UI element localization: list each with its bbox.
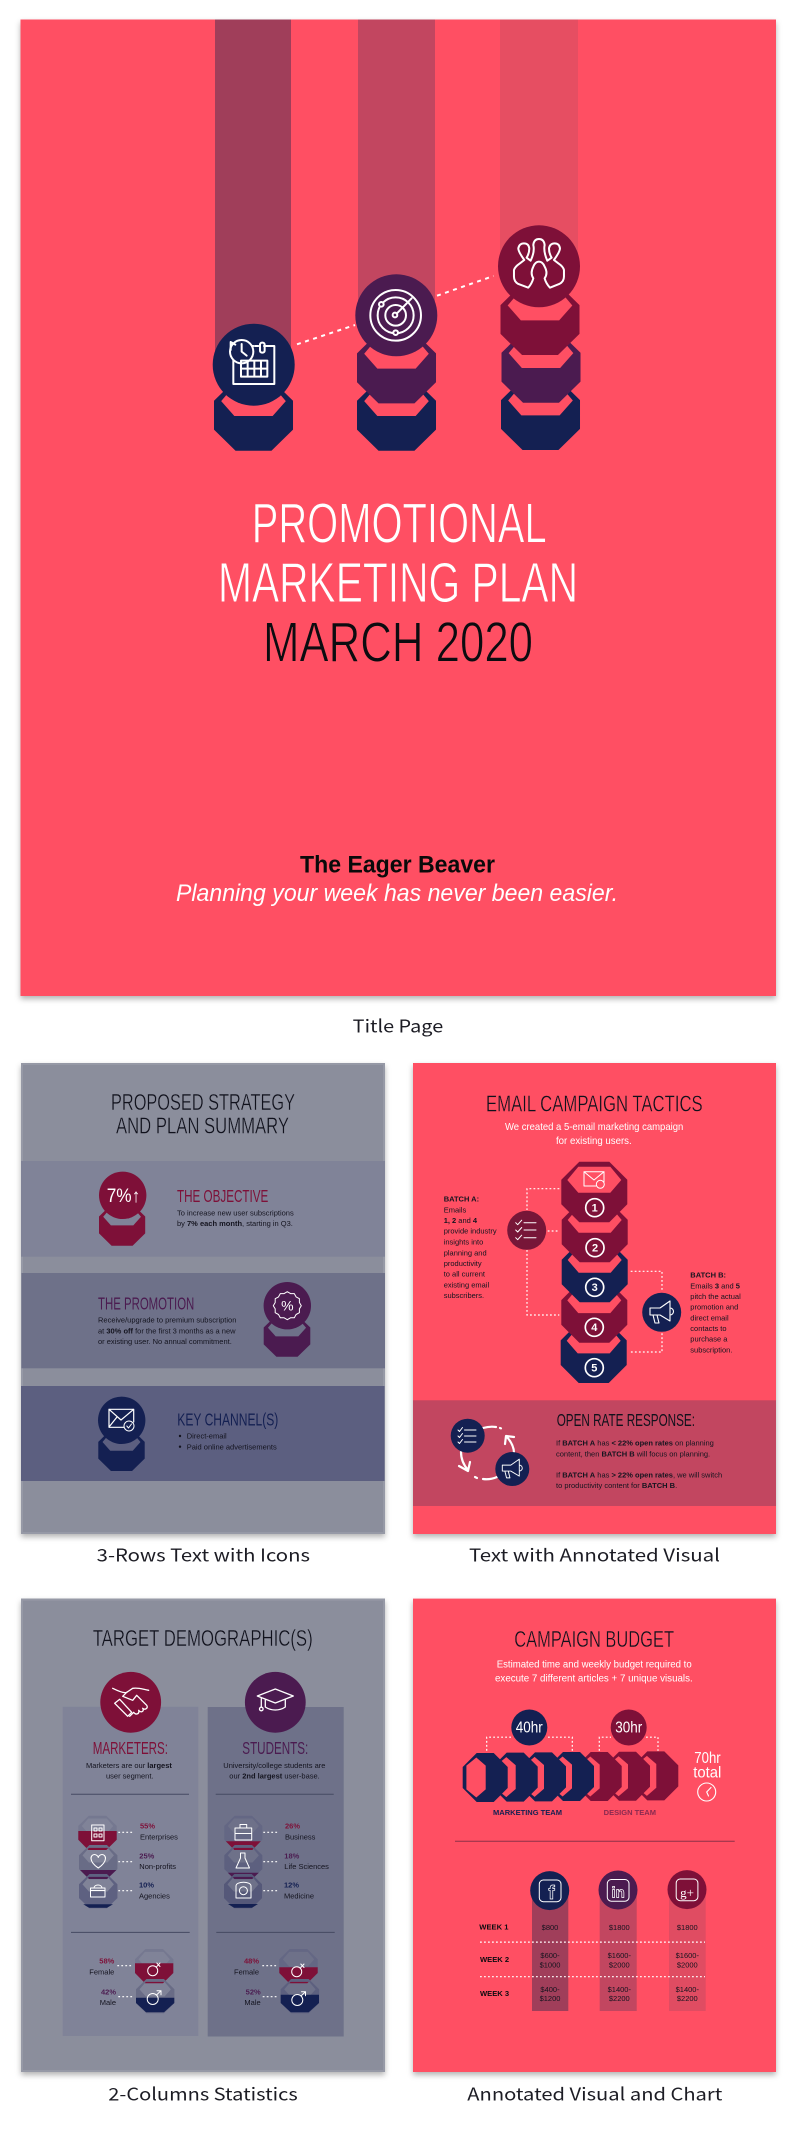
segment labels: marketers: Agencies bbox=[139, 1891, 170, 1900]
segment labels: marketers: Non-profits bbox=[139, 1862, 176, 1871]
icon: heart bbox=[91, 1854, 105, 1868]
row labels: WEEK 3 bbox=[480, 1989, 509, 1998]
heading: TARGET DEMOGRAPHIC(S) bbox=[93, 1625, 313, 1651]
numbers in stack: 5 bbox=[591, 1363, 597, 1375]
text: batch A: BATCH A: bbox=[444, 1195, 479, 1204]
numbers in stack: 2 bbox=[592, 1243, 598, 1255]
text: batch B: purchase a bbox=[690, 1335, 728, 1344]
chart: weekly budget bbox=[479, 1870, 706, 2011]
text: batch A: planning and bbox=[444, 1248, 487, 1257]
team labels: DESIGN TEAM bbox=[604, 1808, 656, 1817]
label: marketers: MARKETERS: bbox=[93, 1738, 168, 1758]
text: batch B: direct email bbox=[690, 1313, 729, 1322]
timeline: team hours bbox=[463, 1751, 678, 1802]
row labels: WEEK 2 bbox=[480, 1955, 509, 1964]
budget values: $1000 bbox=[540, 1960, 560, 1969]
segment labels: marketers: 55% bbox=[140, 1822, 155, 1831]
cycle arrows bbox=[459, 1427, 514, 1479]
label: marketers: Marketers are our largest bbox=[86, 1761, 172, 1770]
total hours: total bbox=[693, 1765, 721, 1782]
subheading bbox=[495, 1658, 693, 1685]
budget values: $400- bbox=[540, 1985, 560, 1994]
icon: facebook bbox=[530, 1871, 569, 1910]
text: batch B bbox=[690, 1271, 741, 1354]
budget values: $1600- bbox=[676, 1951, 699, 1960]
icon: percent badge: % bbox=[281, 1298, 294, 1314]
heading bbox=[111, 1089, 295, 1138]
text: batch B: pitch the actual bbox=[690, 1292, 741, 1301]
total hours bbox=[693, 1750, 721, 1801]
icon: envelope in stack bbox=[584, 1172, 604, 1188]
segment labels: marketers: Enterprises bbox=[140, 1832, 178, 1841]
text: promotion: or existing user. No annual commitment. bbox=[98, 1337, 232, 1346]
panel: email campaign tactics bbox=[413, 1063, 776, 1534]
caption: annotated chart: Annotated Visual and Chart bbox=[467, 2082, 723, 2107]
bar: google plus bbox=[669, 1890, 706, 2011]
budget values: $2000 bbox=[677, 1960, 698, 1969]
label: students bbox=[223, 1738, 325, 1781]
segment labels: marketers: 10% bbox=[139, 1881, 154, 1890]
segment labels: students: 12% bbox=[284, 1881, 299, 1890]
text: promotion: THE PROMOTION bbox=[98, 1293, 194, 1313]
chart: student segments bbox=[224, 1816, 262, 1908]
segment labels: students: 18% bbox=[284, 1852, 300, 1861]
segment labels: students bbox=[263, 1822, 329, 1900]
text: batch A: subscribers. bbox=[444, 1291, 484, 1300]
badge: 40 hours bbox=[511, 1710, 547, 1746]
dotted connectors: batch B bbox=[631, 1271, 662, 1352]
gender labels: marketers: Male bbox=[100, 1998, 116, 2007]
icon: megaphone bbox=[642, 1293, 681, 1332]
band: open rate response bbox=[413, 1400, 776, 1506]
text: batch A: existing email bbox=[444, 1280, 489, 1289]
icon: seven percent up: 7%↑ bbox=[107, 1186, 140, 1207]
team labels bbox=[493, 1808, 656, 1817]
segment labels: students: Life Sciences bbox=[284, 1862, 329, 1871]
company name: The Eager Beaver bbox=[300, 852, 495, 879]
chart: marketer segments bbox=[78, 1816, 117, 1908]
icon: calendar and clock bbox=[230, 340, 274, 384]
segment labels: students: Business bbox=[285, 1832, 316, 1841]
bar: column three bbox=[500, 20, 578, 266]
segment labels: students: Medicine bbox=[284, 1891, 314, 1900]
bar: linkedin bbox=[600, 1890, 637, 2011]
text: batch B: contacts to bbox=[690, 1324, 727, 1333]
gender labels: marketers bbox=[89, 1957, 134, 2007]
icon: building bbox=[92, 1825, 104, 1841]
bar: column one bbox=[215, 20, 291, 366]
heading: PROPOSED STRATEGY bbox=[111, 1089, 295, 1115]
icon: flask bbox=[236, 1853, 250, 1868]
budget values: $600- bbox=[540, 1951, 560, 1960]
text: batch B: Emails 3 and 5 bbox=[690, 1281, 740, 1290]
segment labels: students: 26% bbox=[285, 1822, 300, 1831]
gender labels: marketers: Female bbox=[89, 1967, 114, 1976]
text: objective bbox=[177, 1186, 294, 1228]
label: students: our 2nd largest user-base. bbox=[229, 1772, 320, 1781]
budget values: $1600- bbox=[608, 1951, 631, 1960]
heading: EMAIL CAMPAIGN TACTICS bbox=[486, 1090, 703, 1116]
text: key channels bbox=[177, 1410, 278, 1451]
badge: 40 hours: 40hr bbox=[516, 1720, 543, 1737]
subheading: execute 7 different articles + 7 unique visuals. bbox=[495, 1673, 693, 1685]
text: batch A: Emails bbox=[444, 1205, 466, 1214]
chart: student gender bbox=[279, 1949, 319, 2013]
panel: target demographics bbox=[21, 1599, 385, 2072]
text: batch A: productivity bbox=[444, 1259, 482, 1268]
heading: AND PLAN SUMMARY bbox=[116, 1112, 289, 1138]
panel: campaign budget bbox=[413, 1599, 776, 2072]
subheading: Estimated time and weekly budget required to bbox=[497, 1658, 692, 1670]
column: marketers bbox=[63, 1672, 198, 2036]
text: batch B: promotion and bbox=[690, 1303, 738, 1312]
text: promotion: at 30% off for the first 3 months as a new bbox=[98, 1326, 236, 1335]
subheading: We created a 5-email marketing campaign bbox=[505, 1121, 683, 1133]
tagline: Planning your week has never been easier. bbox=[176, 880, 618, 907]
gender labels: marketers: 42% bbox=[101, 1988, 116, 1997]
text: promotion: Receive/upgrade to premium subscription bbox=[98, 1316, 236, 1325]
label: students: University/college students are bbox=[223, 1761, 325, 1770]
text: key channels: Direct-email bbox=[187, 1432, 227, 1441]
numbers in stack bbox=[585, 1199, 604, 1377]
gender labels: students: 52% bbox=[246, 1988, 261, 1997]
icon: audience group bbox=[514, 239, 564, 288]
label: students: STUDENTS: bbox=[242, 1738, 308, 1758]
icon: radar bbox=[370, 290, 421, 341]
caption: title page: Title Page bbox=[353, 1014, 443, 1039]
subheading bbox=[505, 1121, 683, 1147]
numbers in stack: 3 bbox=[592, 1282, 598, 1294]
caption: three rows: 3-Rows Text with Icons bbox=[97, 1543, 310, 1568]
text: open rate response: If BATCH A has > 22% open rates, we will switch bbox=[556, 1470, 722, 1479]
text: batch A bbox=[444, 1195, 497, 1300]
stack: column three bbox=[498, 225, 581, 450]
dotted brackets bbox=[487, 1737, 658, 1751]
stack: column one bbox=[213, 324, 295, 451]
chart: marketer gender bbox=[135, 1949, 174, 2013]
gender labels: students: 48% bbox=[244, 1957, 259, 1966]
badge: 30 hours: 30hr bbox=[615, 1720, 643, 1737]
caption: annotated visual: Text with Annotated Visual bbox=[469, 1543, 720, 1568]
icon: percent badge bbox=[264, 1282, 311, 1357]
title line one: PROMOTIONAL bbox=[252, 493, 547, 556]
icon: person at desk bbox=[90, 1885, 105, 1897]
badge: 30 hours bbox=[611, 1710, 647, 1746]
icon: envelope bbox=[98, 1397, 145, 1471]
icon: linkedin: in bbox=[612, 1884, 625, 1902]
text: batch B: BATCH B: bbox=[690, 1271, 726, 1280]
icon: medical kit bbox=[236, 1882, 251, 1898]
gender labels: students: Female bbox=[234, 1967, 259, 1976]
caption: two columns: 2-Columns Statistics bbox=[108, 2082, 298, 2107]
icon: checklist bbox=[507, 1211, 546, 1250]
budget values: $1800 bbox=[677, 1923, 698, 1932]
text: objective: THE OBJECTIVE bbox=[177, 1186, 268, 1206]
heading: CAMPAIGN BUDGET bbox=[514, 1626, 674, 1652]
text: open rate response: OPEN RATE RESPONSE: bbox=[557, 1410, 695, 1430]
numbers in stack: 4 bbox=[591, 1322, 598, 1334]
text: key channels: Paid online advertisements bbox=[187, 1442, 277, 1451]
budget values: $1800 bbox=[609, 1923, 630, 1932]
budget values: $800 bbox=[542, 1923, 558, 1932]
text: batch B: subscription. bbox=[690, 1345, 732, 1354]
title line two: MARKETING PLAN bbox=[218, 552, 578, 615]
bar: facebook bbox=[532, 1890, 568, 2011]
text: objective: To increase new user subscriptions bbox=[177, 1209, 294, 1218]
budget values: $2200 bbox=[677, 1994, 698, 2003]
budget values: $2000 bbox=[609, 1960, 630, 1969]
text: promotion bbox=[98, 1293, 236, 1346]
stack: five emails bbox=[561, 1162, 628, 1383]
text: open rate response bbox=[556, 1410, 722, 1490]
label: marketers: user segment. bbox=[106, 1772, 154, 1781]
label: marketers bbox=[86, 1738, 172, 1781]
row: promotion bbox=[22, 1273, 385, 1368]
icon: google plus bbox=[668, 1870, 706, 1909]
total hours: 70hr bbox=[694, 1750, 721, 1767]
budget values: $1400- bbox=[608, 1985, 631, 1994]
icon: checklist small bbox=[451, 1419, 485, 1453]
icon: google plus: g+ bbox=[680, 1885, 694, 1900]
column: students bbox=[208, 1672, 344, 2036]
segment labels: marketers: 25% bbox=[139, 1852, 155, 1861]
text: open rate response: to productivity content for BATCH B. bbox=[556, 1481, 677, 1490]
stack: column two bbox=[355, 274, 437, 451]
text: key channels: KEY CHANNEL(S) bbox=[177, 1410, 278, 1430]
text: batch A: insights into bbox=[444, 1238, 483, 1247]
segment labels: marketers bbox=[118, 1822, 178, 1900]
row: key channels bbox=[21, 1386, 384, 1481]
row: objective bbox=[21, 1161, 385, 1257]
text: open rate response: If BATCH A has < 22% open rates on planning bbox=[556, 1439, 714, 1448]
text: objective: by 7% each month, starting in Q3. bbox=[177, 1219, 293, 1228]
budget values: $1400- bbox=[676, 1985, 699, 1994]
icon: graduation cap bbox=[245, 1672, 306, 1733]
budget values: $2200 bbox=[609, 1994, 630, 2003]
icon: seven percent up bbox=[99, 1172, 146, 1246]
row labels bbox=[479, 1923, 509, 1998]
title line three: MARCH 2020 bbox=[263, 612, 533, 675]
dotted connectors: batch A bbox=[527, 1189, 559, 1315]
budget values: $1200 bbox=[540, 1994, 560, 2003]
text: batch A: to all current bbox=[444, 1270, 486, 1279]
panel: title page bbox=[20, 20, 776, 996]
icon: linkedin bbox=[598, 1870, 638, 1910]
row labels: WEEK 1 bbox=[479, 1923, 509, 1932]
icon: facebook: f bbox=[548, 1883, 555, 1904]
bar: column two bbox=[358, 20, 435, 316]
text: batch A: provide industry bbox=[444, 1227, 497, 1236]
text: batch A: 1, 2 and 4 bbox=[444, 1216, 478, 1225]
numbers in stack: 1 bbox=[592, 1203, 598, 1215]
icon: megaphone small bbox=[495, 1452, 529, 1486]
subheading: for existing users. bbox=[556, 1135, 632, 1147]
icon: handshake bbox=[100, 1672, 161, 1733]
gender labels: students: Male bbox=[244, 1998, 261, 2007]
dotted connector lines bbox=[297, 276, 494, 344]
panel: strategy summary bbox=[21, 1063, 385, 1534]
budget values bbox=[540, 1923, 699, 2003]
gender labels: students bbox=[234, 1957, 278, 2007]
gender labels: marketers: 58% bbox=[99, 1957, 115, 1966]
text: open rate response: content, then BATCH B will focus on planning. bbox=[556, 1449, 710, 1458]
icon: briefcase bbox=[235, 1824, 252, 1840]
team labels: MARKETING TEAM bbox=[493, 1808, 562, 1817]
